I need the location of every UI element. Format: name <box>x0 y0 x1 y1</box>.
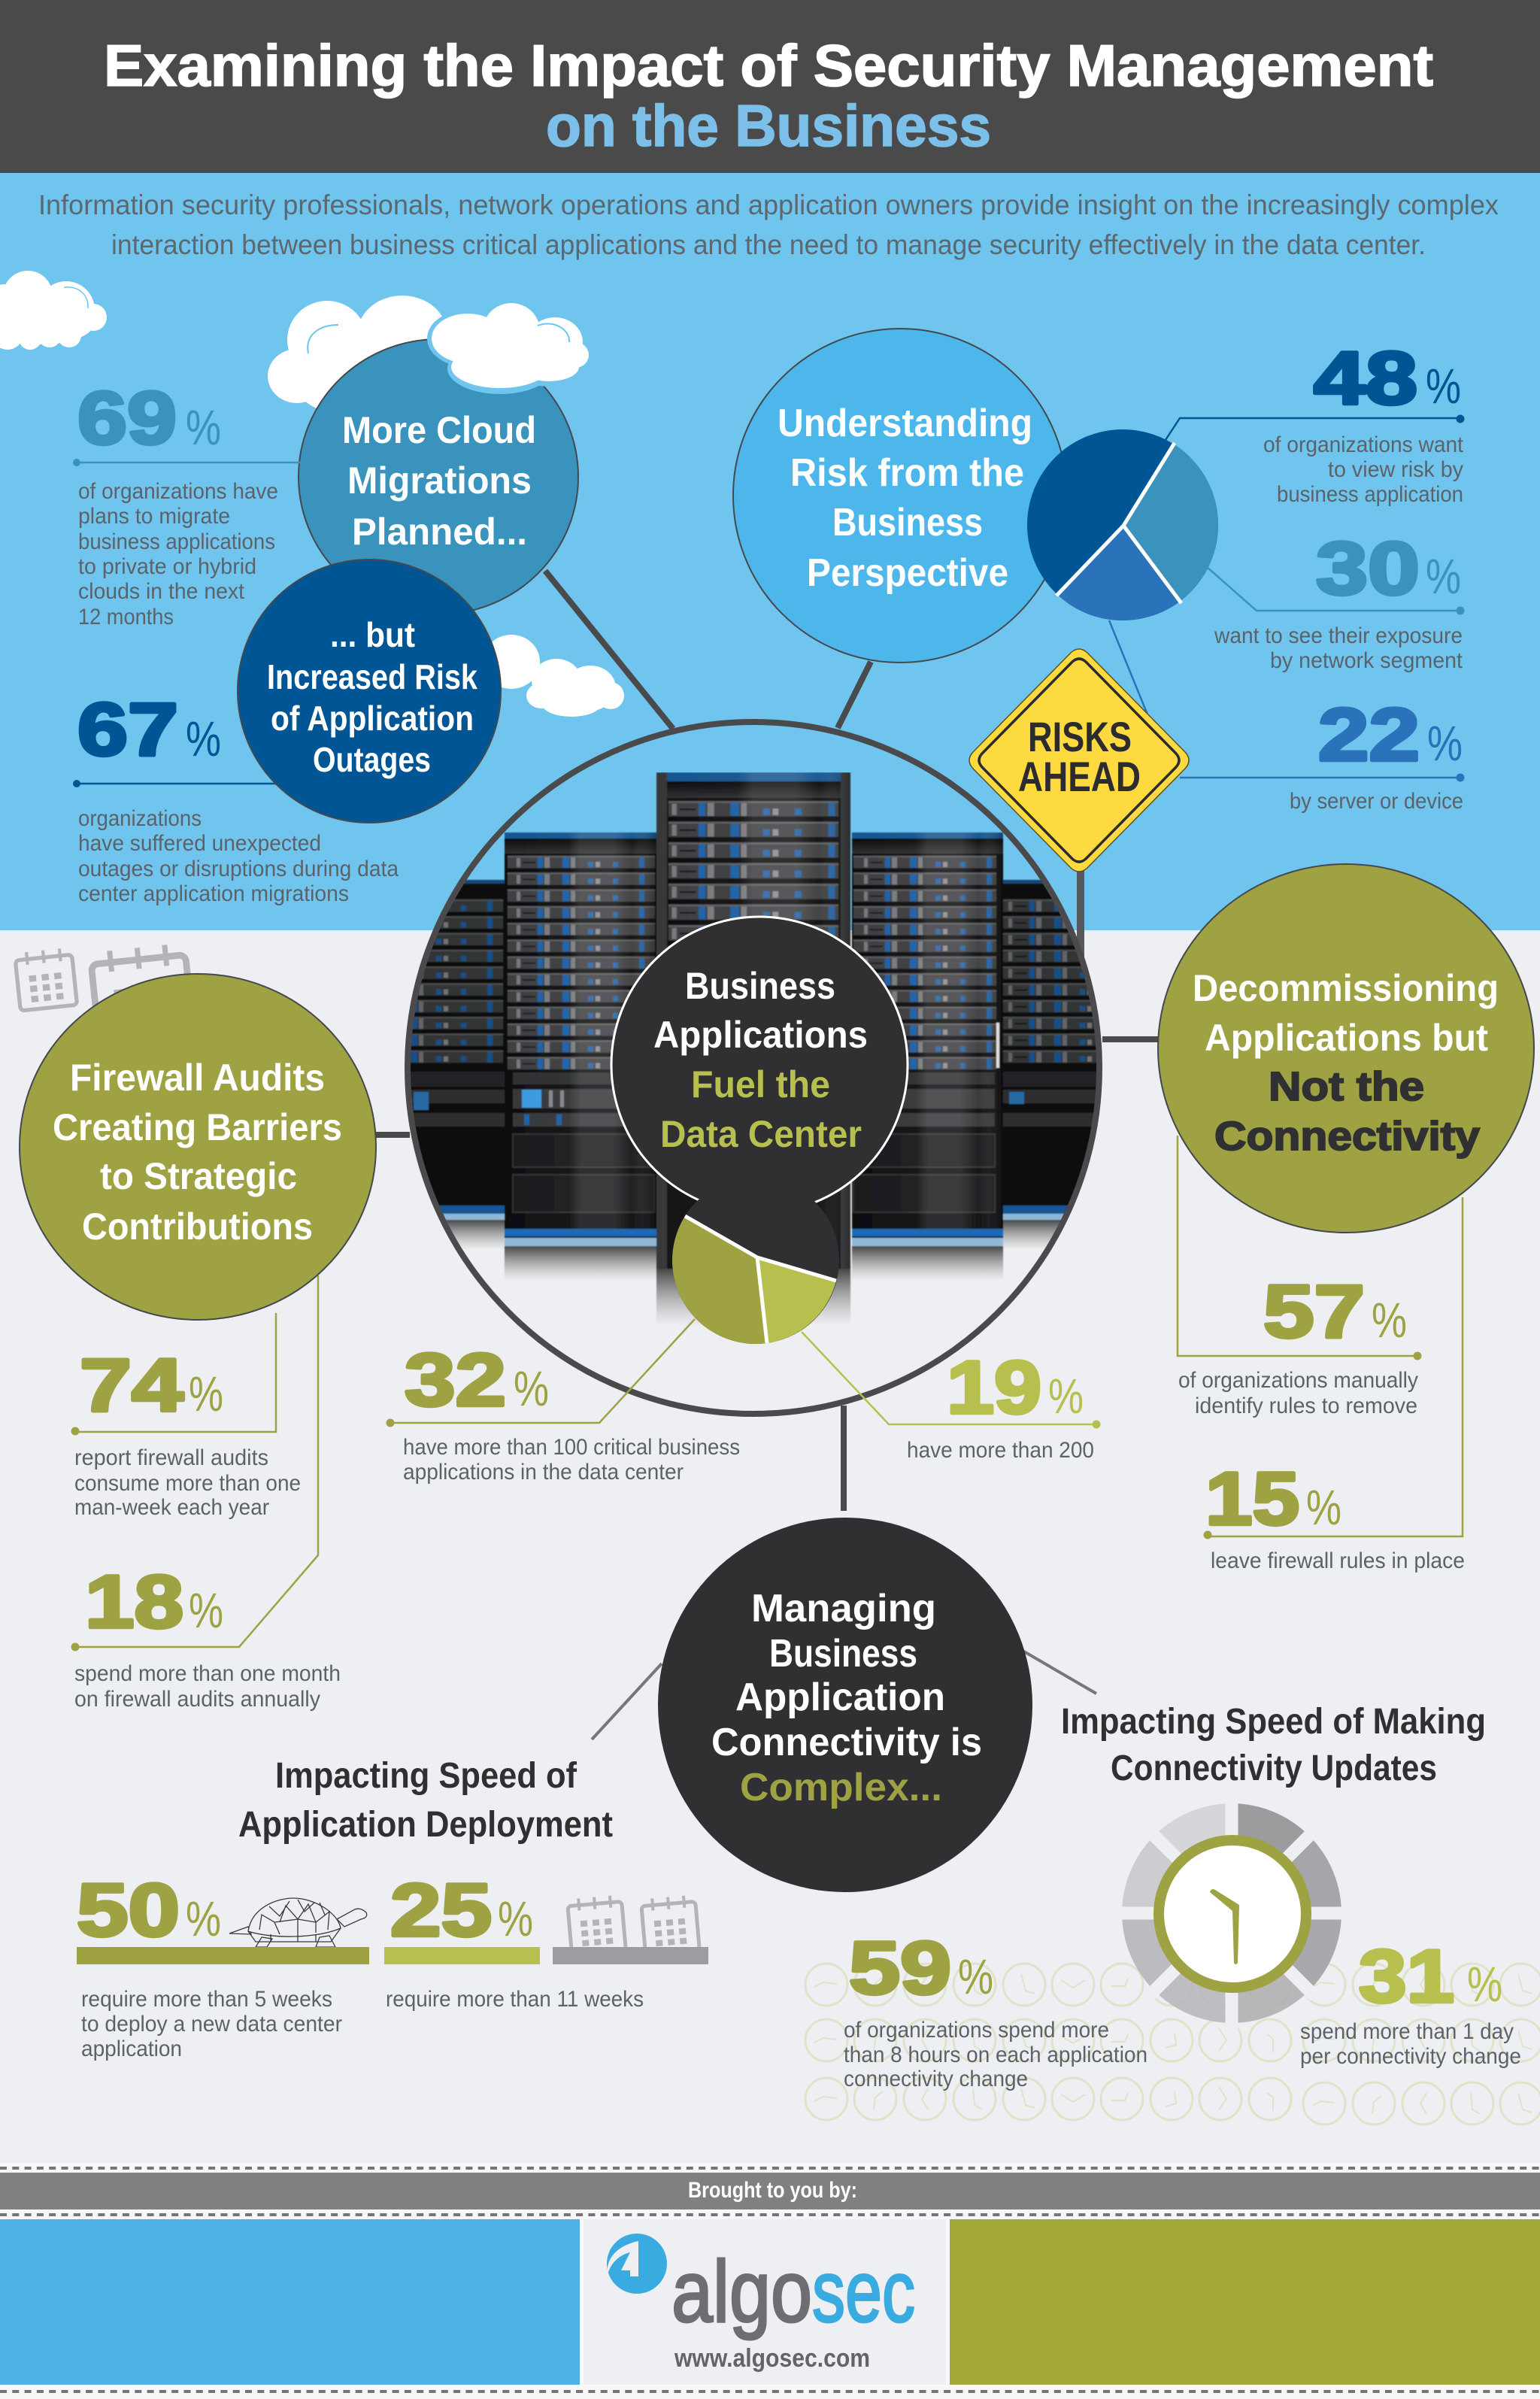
text: 69% description: of organizations have <box>78 479 278 504</box>
icon: turtle <box>229 1898 367 1947</box>
stat: 74% <box>71 1343 223 1435</box>
center circle text: Applications <box>653 1014 868 1056</box>
circle text: Decommissioning <box>1193 967 1499 1009</box>
circle: decommissioning applications <box>1158 864 1534 1233</box>
cloud: small pair behind risk circle <box>483 635 624 717</box>
logo panel background <box>584 2219 946 2385</box>
stat: 30%: % <box>1426 548 1461 604</box>
circle: more cloud migrations <box>299 339 578 614</box>
stat: 59%: % <box>958 1949 993 2004</box>
text: 18% description <box>74 1661 341 1712</box>
circle text: Application <box>735 1676 945 1719</box>
sign text <box>1018 713 1141 800</box>
text: 69% description: 12 months <box>78 605 174 629</box>
text: 30% description: want to see their exposure <box>1214 623 1463 648</box>
text: 30% description: by network segment <box>1270 648 1463 673</box>
stat: 69%: % <box>186 399 221 455</box>
circle text: Understanding <box>778 402 1032 445</box>
logo: algosec: www.algosec.com <box>674 2344 870 2373</box>
circle text: Business <box>832 501 983 544</box>
cloud: front of migration circle <box>427 299 590 394</box>
stat: 18%: % <box>189 1582 223 1638</box>
circle text <box>1193 967 1499 1159</box>
text: 59% description <box>844 2018 1147 2091</box>
hub ring <box>408 722 1099 1414</box>
logo: algosec: algo <box>671 2243 812 2340</box>
clock hands <box>1210 1889 1239 1964</box>
sky background <box>0 173 1540 930</box>
text: 67% description: outages or disruptions during data <box>78 857 399 881</box>
center circle text: Fuel the <box>691 1063 830 1105</box>
text: 25% description: require more than 11 weeks <box>386 1987 644 2012</box>
heading: application deployment: Application Deployment <box>238 1805 613 1845</box>
stat: 32%: 32 <box>405 1338 506 1421</box>
text: 67% description: have suffered unexpected <box>78 831 321 856</box>
sign pole <box>1077 865 1084 959</box>
heading: connectivity updates: Impacting Speed of Making <box>1061 1702 1486 1742</box>
text: 15% description: leave firewall rules in place <box>1211 1548 1465 1573</box>
sign text: AHEAD <box>1018 753 1141 800</box>
leader line: firewall 18% <box>75 1275 318 1647</box>
stat: 69%: 69 <box>77 376 177 459</box>
stat: 25%: % <box>498 1891 533 1946</box>
text: 50% description <box>81 1987 342 2061</box>
stat: 15%: 15 <box>1205 1457 1299 1540</box>
stat: 67%: % <box>186 711 221 766</box>
text: 57% description: identify rules to remove <box>1195 1394 1417 1418</box>
circle text: Applications but <box>1205 1017 1488 1059</box>
stat: 48%: % <box>1426 358 1461 414</box>
text: 48% description: business application <box>1277 482 1463 507</box>
leader line: decommissioning left branch <box>1178 1136 1417 1356</box>
circle text <box>711 1587 982 1809</box>
stat: 31%: 31 <box>1359 1934 1454 2018</box>
stat: 18%: 18 <box>85 1560 183 1643</box>
center circle text: Data Center <box>660 1113 862 1155</box>
text: 74% description: man-week each year <box>74 1495 269 1520</box>
footer band: Brought to you by: <box>688 2178 857 2203</box>
stat: 22%: % <box>1427 715 1463 771</box>
leader lines from risk pie <box>1109 418 1460 778</box>
text: 59% description: of organizations spend more <box>844 2018 1109 2043</box>
title <box>104 32 1433 159</box>
stat: 22% <box>1318 693 1463 776</box>
circle text: Planned... <box>352 511 527 553</box>
circle text <box>267 615 477 779</box>
intro text <box>38 190 1499 260</box>
text: 32% description: have more than 100 critical business <box>403 1435 740 1460</box>
stat: 15%: % <box>1306 1479 1341 1535</box>
center circle: business applications <box>611 917 908 1213</box>
stat: 48% <box>1314 336 1461 420</box>
bars <box>77 1947 708 1964</box>
stat: 50%: % <box>186 1891 221 1946</box>
text: 50% description: require more than 5 weeks <box>81 1987 332 2012</box>
circle text: More Cloud <box>342 409 536 451</box>
text: 18% description: on firewall audits annually <box>74 1687 320 1712</box>
heading: connectivity updates: Connectivity Updates <box>1111 1748 1437 1788</box>
circle text: Business <box>769 1632 917 1676</box>
stat: 59% <box>849 1926 993 2009</box>
text: 50% description: application <box>81 2037 182 2061</box>
circle text: Outages <box>313 740 431 779</box>
circle text: Perspective <box>807 551 1008 595</box>
stat: 74%: % <box>189 1366 223 1421</box>
circle: firewall audits <box>20 974 376 1320</box>
sign text: RISKS <box>1028 713 1132 760</box>
logo: algosec: sec <box>812 2243 915 2340</box>
header band <box>0 0 1540 173</box>
circle text: Managing <box>751 1587 936 1630</box>
stat: 31%: % <box>1467 1956 1502 2012</box>
circle text: Firewall Audits <box>70 1057 325 1099</box>
text: 67% description: center application migrations <box>78 881 349 906</box>
circle text: ... but <box>330 615 415 654</box>
text: 69% description: to private or hybrid <box>78 554 256 579</box>
calendars behind firewall circle <box>14 943 194 1048</box>
hub: server racks in circle <box>405 722 1102 1414</box>
stat: 32% <box>387 1338 549 1427</box>
heading: connectivity updates <box>1061 1702 1486 1788</box>
footer band <box>0 2173 1540 2209</box>
text: 48% description <box>1263 432 1464 507</box>
text: 31% description: spend more than 1 day <box>1300 2019 1514 2044</box>
leader dots <box>1456 415 1465 782</box>
leader line: 19% <box>802 1332 1096 1424</box>
leader line: decommissioning right branch <box>1208 1197 1463 1536</box>
circle text: Connectivity <box>1214 1114 1480 1159</box>
icon: clock <box>1113 1790 1351 2031</box>
logo: algosec <box>607 2234 915 2373</box>
pie chart: critical applications <box>672 1177 839 1344</box>
footer <box>0 2163 1540 2399</box>
circle text <box>342 409 536 553</box>
stat: 50% <box>77 1868 221 1952</box>
stat: 32%: % <box>514 1360 549 1416</box>
circle text <box>778 402 1032 595</box>
circle text <box>53 1057 342 1248</box>
text: 69% description: plans to migrate <box>78 504 230 529</box>
stat: 57%: 57 <box>1263 1269 1365 1353</box>
rule <box>73 459 301 466</box>
text: 74% description <box>74 1445 301 1520</box>
text: 74% description: consume more than one <box>74 1471 301 1496</box>
circle text: to Strategic <box>100 1155 297 1197</box>
stat: 74%: 74 <box>80 1343 183 1427</box>
text: 19% description: have more than 200 <box>907 1438 1094 1463</box>
stat: 59%: 59 <box>849 1926 951 2009</box>
circle text: Not the <box>1269 1064 1424 1109</box>
stat: 22%: 22 <box>1318 693 1420 776</box>
blue panel <box>0 2219 580 2385</box>
text: 48% description: to view risk by <box>1328 457 1463 482</box>
intro text: interaction between business critical applications and the need to manage security effectively in the data center. <box>111 229 1426 260</box>
circle text: of Application <box>271 699 474 738</box>
cloud: top left <box>0 271 107 350</box>
heading: application deployment: Impacting Speed of <box>275 1756 578 1796</box>
intro text: Information security professionals, network operations and application owners provide insight on the increasingly complex <box>38 190 1499 220</box>
stat: 19%: % <box>1048 1368 1084 1424</box>
text: 31% description <box>1300 2019 1521 2069</box>
circle text: Increased Risk <box>267 657 477 696</box>
text: 69% description <box>78 479 278 629</box>
stat: 25% <box>390 1868 533 1952</box>
clock segments <box>1113 1790 1351 2031</box>
stat: 15% <box>1203 1457 1341 1540</box>
cloud: behind migration circle <box>268 296 447 416</box>
stat: 31% <box>1359 1934 1502 2018</box>
sign: risks ahead <box>969 649 1189 872</box>
center circle text <box>653 965 868 1155</box>
rule <box>73 780 280 787</box>
leader line: 32% <box>390 1319 695 1423</box>
text: 57% description: of organizations manually <box>1178 1368 1418 1393</box>
text: 32% description <box>403 1435 740 1485</box>
title: on the Business <box>546 93 991 159</box>
background clock pattern <box>805 1964 1540 2125</box>
leader line: firewall 74% <box>75 1313 276 1432</box>
text: 67% description <box>78 806 399 906</box>
circle: managing connectivity <box>658 1518 1032 1892</box>
stat: 69% <box>73 376 301 466</box>
text: 30% description <box>1214 623 1463 673</box>
stat: 57%: % <box>1372 1292 1407 1348</box>
stat: 19% <box>947 1345 1101 1429</box>
title: Examining the Impact of Security Management <box>104 32 1433 99</box>
text: 48% description: of organizations want <box>1263 432 1464 457</box>
stat: 25%: 25 <box>390 1868 492 1952</box>
stat: 19%: 19 <box>947 1345 1041 1429</box>
connector lines to hub <box>374 571 1160 1511</box>
text: 59% description: connectivity change <box>844 2067 1028 2091</box>
text: 69% description: clouds in the next <box>78 579 245 604</box>
stat: 57% <box>1263 1269 1421 1360</box>
text: 69% description: business applications <box>78 529 275 554</box>
stat: 30% <box>1316 526 1461 610</box>
text: 18% description: spend more than one month <box>74 1661 341 1686</box>
circle: increased risk of outages <box>238 560 501 823</box>
circle text: Connectivity is <box>711 1721 982 1764</box>
circle: understanding risk <box>733 329 1067 663</box>
stat: 67%: 67 <box>77 687 178 771</box>
heading: application deployment <box>238 1756 613 1845</box>
connector lines from managing circle <box>592 1651 1096 1739</box>
text: 67% description: organizations <box>78 806 202 831</box>
stat: 50%: 50 <box>77 1868 180 1952</box>
circle text: Risk from the <box>790 451 1024 495</box>
text: 57% description <box>1178 1368 1418 1418</box>
text: 32% description: applications in the data center <box>403 1460 684 1485</box>
text: 74% description: report firewall audits <box>74 1445 268 1470</box>
clock face <box>1159 1840 1306 1988</box>
circle text: Creating Barriers <box>53 1106 342 1148</box>
circle text: Complex... <box>740 1766 942 1809</box>
green panel <box>950 2219 1540 2385</box>
text: 22% description: by server or device <box>1290 789 1463 814</box>
center circle text: Business <box>685 965 835 1007</box>
stat: 18% <box>71 1560 223 1651</box>
circle text: Migrations <box>347 459 532 502</box>
circle text: Contributions <box>82 1206 313 1248</box>
text: 31% description: per connectivity change <box>1300 2044 1521 2069</box>
icon: calendars <box>567 1894 699 1954</box>
stat: 30%: 30 <box>1316 526 1420 610</box>
stat: 48%: 48 <box>1314 336 1417 420</box>
pie chart: risk view <box>1027 429 1218 620</box>
text: 59% description: than 8 hours on each application <box>844 2043 1147 2067</box>
server racks image <box>405 772 1102 1326</box>
stat: 67% <box>73 687 280 787</box>
text: 50% description: to deploy a new data center <box>81 2012 342 2037</box>
